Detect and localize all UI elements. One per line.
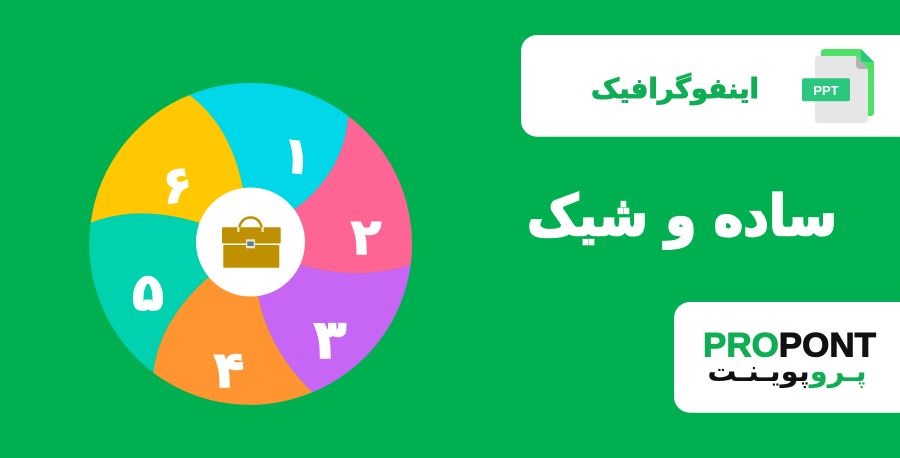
segment 4 [153,243,312,405]
logo persian text: پـروپویـنـت [707,354,867,389]
center circle [196,188,305,296]
number 2: ۲ [351,208,381,266]
number 3: ۳ [314,308,347,371]
card: logo [674,302,900,413]
number 6: ۶ [158,154,196,216]
segment 3 [251,243,411,392]
icon: briefcase [222,218,281,268]
title: ساده و شیک [527,183,837,249]
number 4: ۴ [214,341,244,399]
segment 1 [189,83,348,243]
number 1: ۱ [279,126,315,186]
logo wordmark: PROPONT [703,327,876,365]
segment 5 [89,213,251,373]
number 5: ۵ [132,263,164,323]
segment 2 [251,116,412,273]
segment 6 [91,95,251,243]
wheel chart [89,83,412,405]
card: infographic heading [521,35,900,137]
heading text: اینفوگرافیک [591,72,759,105]
icon: PPT file [802,49,874,123]
icon: PPT file: PPT [813,83,839,98]
